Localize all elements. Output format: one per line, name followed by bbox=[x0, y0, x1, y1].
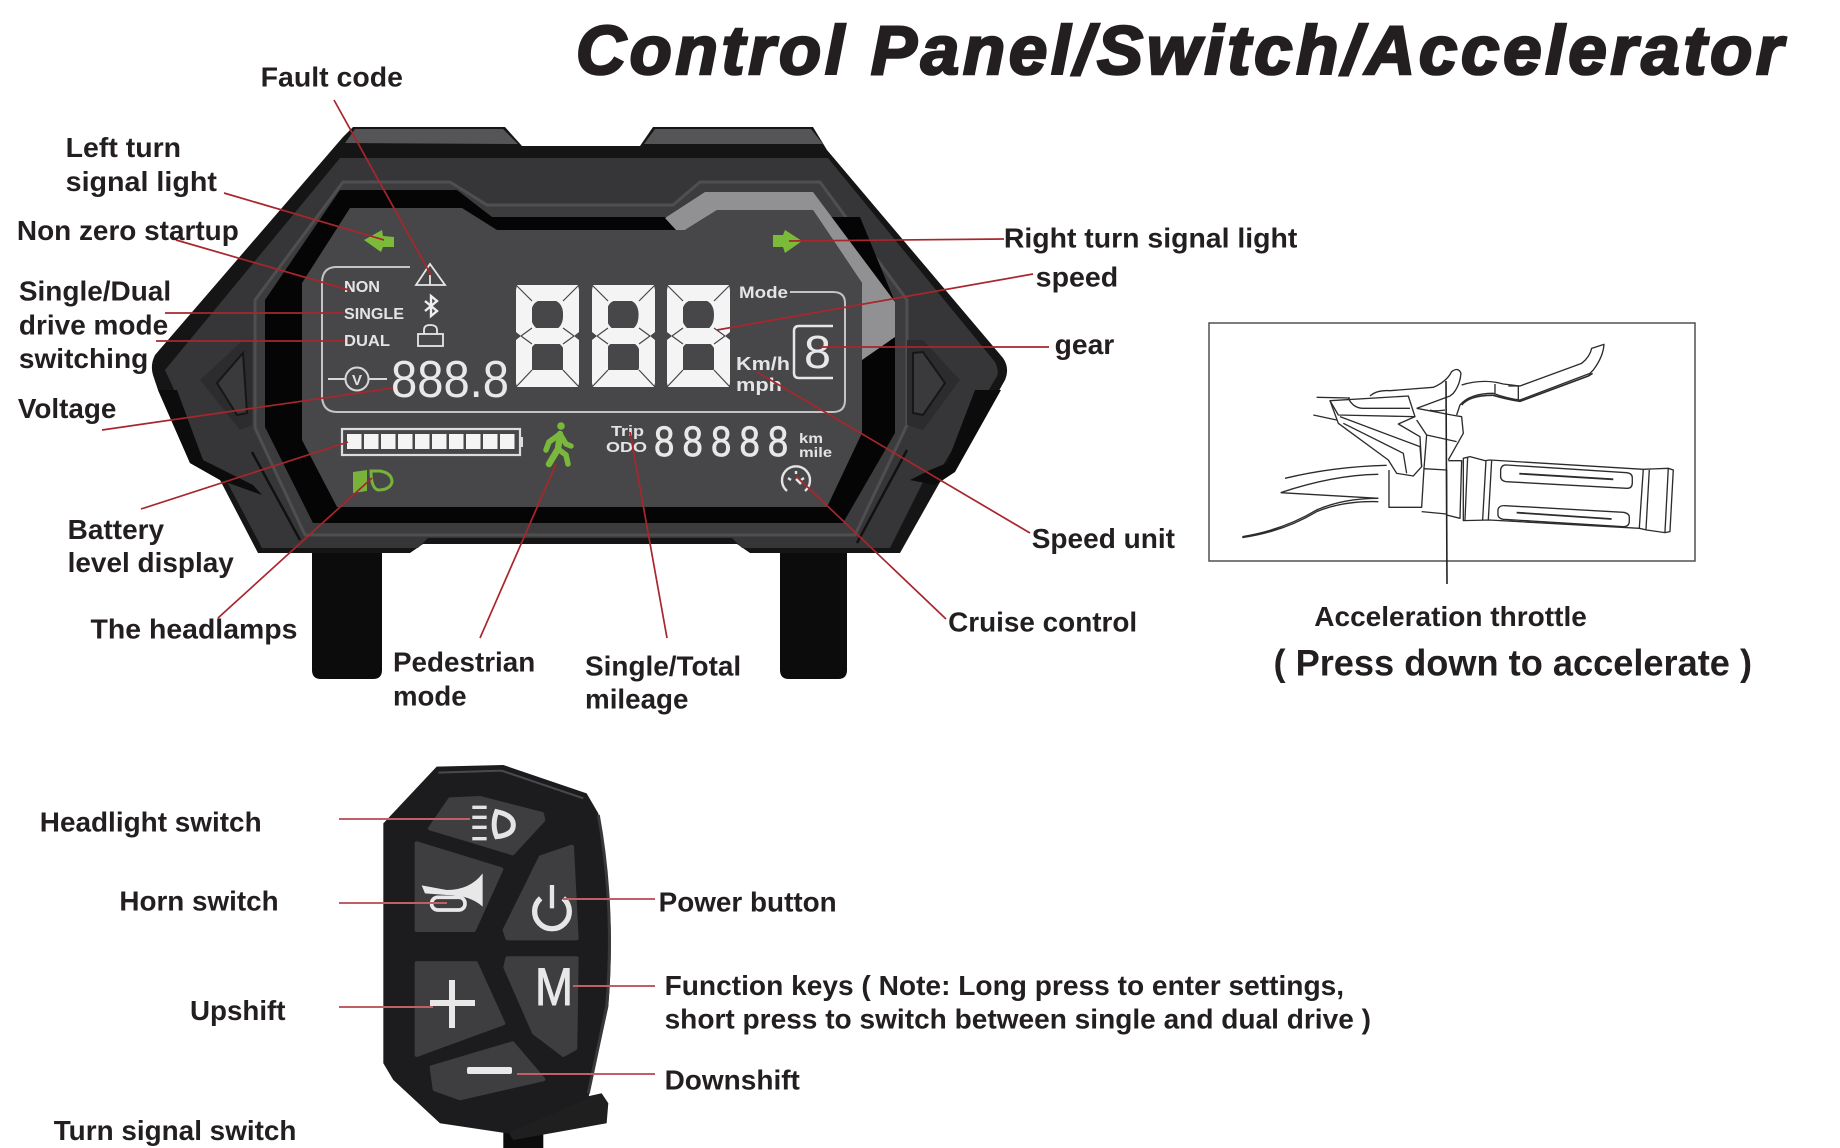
leader: right turn bbox=[789, 239, 1004, 241]
icon: bluetooth bbox=[425, 296, 437, 316]
trip and odometer labels bbox=[606, 423, 647, 456]
label: pedestrian mode: mode bbox=[393, 680, 467, 711]
label: voltage: Voltage bbox=[18, 393, 116, 424]
gear readout bbox=[794, 326, 833, 378]
panel: handlebar switch keypad bbox=[383, 765, 611, 1148]
label: left turn signal light: signal light bbox=[66, 166, 217, 197]
label: battery level display: level display bbox=[68, 547, 234, 578]
leader: pedestrian bbox=[480, 464, 556, 638]
label: acceleration throttle: Acceleration throttle bbox=[1314, 601, 1587, 632]
leader: voltage bbox=[102, 388, 393, 430]
icon: headlight bbox=[472, 807, 513, 839]
leader: mileage bbox=[630, 432, 667, 638]
leader: gear bbox=[820, 346, 1049, 348]
panel: throttle illustration bbox=[1209, 323, 1695, 584]
label: single/dual drive mode switching: switching bbox=[19, 343, 148, 374]
leader: battery bbox=[141, 442, 348, 509]
label: single/dual drive mode switching bbox=[19, 275, 171, 374]
icon: horn bbox=[422, 873, 483, 910]
label: single/dual drive mode switching: drive mode bbox=[19, 309, 168, 340]
speed readout: 888 bbox=[512, 262, 738, 414]
leader: function keys bbox=[573, 985, 655, 987]
label: left turn signal light bbox=[66, 132, 217, 197]
title: Control Panel/Switch/Accelerator bbox=[576, 12, 1786, 89]
label: battery level display bbox=[68, 514, 234, 578]
leader: left turn bbox=[224, 193, 384, 240]
drive mode indicators: NON bbox=[344, 279, 380, 296]
leader: speed bbox=[717, 274, 1033, 330]
label: cruise control: Cruise control bbox=[948, 607, 1137, 638]
leader: single mode bbox=[165, 312, 344, 314]
label: left turn signal light: Left turn bbox=[66, 132, 181, 163]
leader: power button bbox=[563, 898, 655, 900]
icon: headlamp bbox=[353, 470, 392, 493]
speed units: Km/h bbox=[736, 354, 790, 374]
leader: cruise bbox=[796, 476, 946, 619]
function key M: M bbox=[535, 958, 573, 1017]
label: power button: Power button bbox=[659, 886, 837, 917]
label: single/total mileage bbox=[585, 651, 741, 714]
label: speed: speed bbox=[1036, 262, 1118, 293]
leader: upshift bbox=[339, 1006, 433, 1008]
panel: LCD dashboard bbox=[152, 127, 1007, 679]
label: function keys note bbox=[665, 970, 1371, 1035]
icon: cruise control bbox=[782, 466, 810, 491]
voltage symbol: V bbox=[352, 372, 362, 389]
illustration frame bbox=[1209, 323, 1695, 561]
mileage readout: 88888 bbox=[654, 418, 796, 466]
battery level bar bbox=[342, 429, 523, 455]
icon: left turn signal bbox=[364, 230, 394, 252]
label: fault code: Fault code bbox=[261, 62, 403, 93]
leader: downshift bbox=[517, 1073, 655, 1075]
label: pedestrian mode bbox=[393, 647, 535, 711]
voltage symbol bbox=[328, 368, 387, 390]
label: battery level display: Battery bbox=[68, 514, 165, 545]
speed units: mph bbox=[736, 375, 782, 395]
drive mode indicators bbox=[344, 279, 404, 350]
icon: fault warning triangle bbox=[416, 264, 445, 285]
voltage readout: 888.8 bbox=[391, 351, 509, 409]
label: single/total mileage: mileage bbox=[585, 683, 688, 714]
distance units: mile bbox=[799, 444, 832, 460]
label: press down to accelerate: ( Press down to accelerate ) bbox=[1273, 643, 1752, 684]
icon: plus bbox=[430, 980, 475, 1028]
label: right turn signal light: Right turn signal light bbox=[1004, 223, 1297, 254]
keypad body bbox=[383, 765, 611, 1148]
leader: headlamps bbox=[218, 478, 372, 618]
label: turn signal switch: Turn signal switch bbox=[54, 1115, 296, 1146]
trip and odometer labels: ODO bbox=[606, 439, 647, 456]
label: horn switch: Horn switch bbox=[119, 885, 279, 916]
LCD frame line bbox=[322, 267, 845, 412]
label: non zero startup: Non zero startup bbox=[17, 215, 239, 246]
distance units: km bbox=[799, 430, 823, 446]
label: upshift: Upshift bbox=[190, 995, 286, 1026]
leader: fault code bbox=[334, 100, 431, 275]
leader: speed unit bbox=[757, 372, 1030, 533]
label: function keys note: short press to switch between single and dual drive ) bbox=[665, 1004, 1371, 1035]
drive mode indicators: DUAL bbox=[344, 333, 390, 350]
distance units bbox=[799, 430, 832, 460]
leader: non zero startup bbox=[176, 240, 349, 290]
label: downshift: Downshift bbox=[665, 1064, 800, 1095]
icon: minus bbox=[467, 1067, 512, 1074]
label: speed unit: Speed unit bbox=[1032, 523, 1175, 554]
leader: headlight switch bbox=[339, 818, 470, 820]
icon: right turn signal bbox=[773, 230, 802, 253]
label: single/dual drive mode switching: Single/Dual bbox=[19, 275, 171, 306]
icon: pedestrian bbox=[546, 422, 571, 464]
throttle line drawing bbox=[1242, 344, 1673, 538]
speed units bbox=[736, 354, 790, 395]
label: headlight switch: Headlight switch bbox=[40, 807, 262, 838]
label: single/total mileage: Single/Total bbox=[585, 651, 741, 682]
dashboard housing bbox=[152, 127, 1007, 553]
label: pedestrian mode: Pedestrian bbox=[393, 647, 535, 678]
trip and odometer labels: Trip bbox=[611, 423, 644, 440]
label: function keys note: Function keys ( Note: Long press to enter settings, bbox=[665, 970, 1344, 1001]
icon: lock bbox=[418, 325, 443, 346]
leader: horn switch bbox=[339, 902, 447, 904]
mount bracket right bbox=[780, 545, 847, 679]
icon: power bbox=[535, 885, 569, 929]
drive mode indicators: SINGLE bbox=[344, 306, 404, 323]
gear readout: 8 bbox=[804, 326, 831, 378]
label: gear: gear bbox=[1055, 329, 1114, 360]
label: the headlamps: The headlamps bbox=[91, 614, 297, 645]
leader: dual mode bbox=[156, 340, 345, 342]
throttle pointer line bbox=[1446, 381, 1447, 584]
mount bracket left bbox=[312, 545, 382, 679]
mode label: Mode bbox=[739, 283, 788, 302]
